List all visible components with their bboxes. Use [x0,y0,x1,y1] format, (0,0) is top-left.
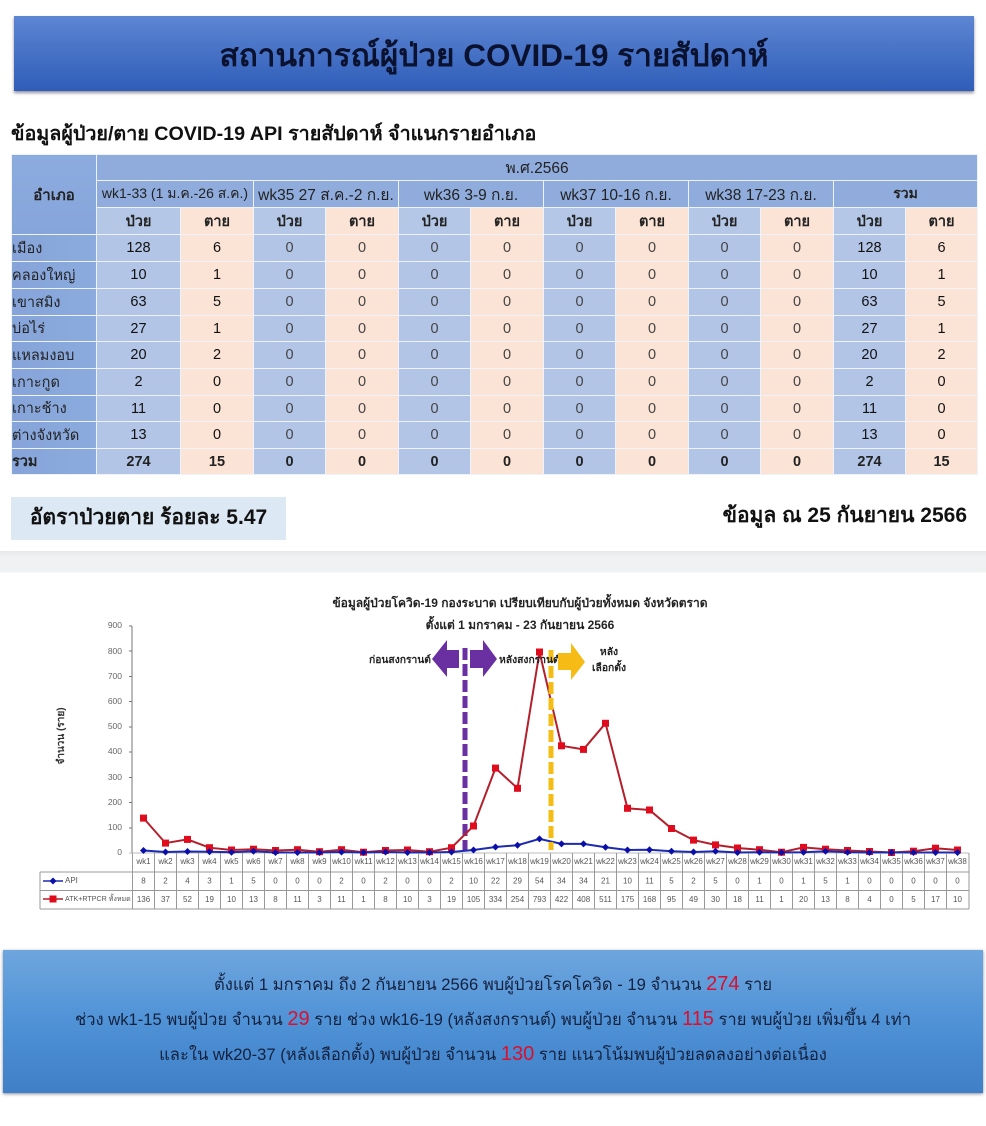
district data table: 0 [575,400,584,416]
ATK+RTPCR values: 8 [383,895,388,904]
district data table: wk37 10-16 ก.ย. [560,186,672,204]
district data table: 0 [213,374,221,390]
district data table: ตาย [494,214,520,230]
district data table: 0 [430,240,439,256]
fatality rate box [11,497,286,540]
district data table: 0 [648,267,656,283]
district data table: 0 [575,427,584,443]
district data table: 0 [720,454,729,470]
ATK+RTPCR values: 793 [533,895,547,904]
ATK+RTPCR values: 10 [403,895,412,904]
ATK+RTPCR values: 5 [911,895,916,904]
district data table: 0 [503,347,511,363]
ATK+RTPCR values: 13 [821,895,830,904]
API values: 0 [735,876,740,886]
district data table: รวม [12,454,38,470]
district data table: ต่างจังหวัด [12,428,79,444]
legend: API [43,876,78,885]
week labels: wk10 [331,857,351,866]
y axis: 300 [108,772,122,782]
district data table: ป่วย [277,214,302,230]
week labels: wk36 [903,857,923,866]
API values: 5 [823,876,828,886]
district data table: 0 [937,374,946,390]
week labels: wk21 [573,857,593,866]
API values: 22 [491,876,500,886]
title banner: สถานการณ์ผู้ป่วย COVID-19 รายสัปดาห์ [219,37,768,73]
week labels: wk7 [267,857,283,866]
district data table: 0 [575,374,584,390]
district data table: 0 [575,294,584,310]
district data table: 0 [575,347,584,363]
district data table: 1 [213,267,221,283]
district data table: 0 [430,400,439,416]
district data table: 0 [575,320,584,336]
district data table: เกาะกูด [12,374,60,390]
API values: 0 [317,876,322,886]
ATK+RTPCR values: 8 [273,895,278,904]
API values: 0 [295,876,300,886]
district data table: 1 [937,320,946,336]
district data table: 0 [937,400,946,416]
y axis label: จำนวน (ราย) [55,707,67,765]
API values: 0 [911,876,916,886]
district data table: 0 [648,347,656,363]
API values: 0 [933,876,938,886]
district data table: 274 [126,454,151,470]
week labels: wk29 [749,857,769,866]
district data table: 0 [285,374,294,390]
district data table [11,154,978,475]
y axis: 700 [108,671,122,681]
district data table: แหลมงอบ [12,348,74,364]
arrow: after Songkran [470,640,560,677]
ATK+RTPCR values: 49 [689,895,698,904]
district data table: wk35 27 ส.ค.-2 ก.ย. [258,186,394,204]
district data table: wk36 3-9 ก.ย. [424,186,518,204]
district data table: 5 [213,294,221,310]
y axis: 500 [108,721,122,731]
district data table: 0 [213,400,221,416]
district data table: 0 [430,320,439,336]
district data table: 0 [648,400,656,416]
district data table: พ.ศ.2566 [505,160,569,177]
ATK+RTPCR values: 18 [733,895,742,904]
week labels: wk2 [157,857,173,866]
API values: 0 [273,876,278,886]
ATK+RTPCR values: 52 [183,895,192,904]
summary line 2: ช่วง wk1-15 พบผู้ป่วย จำนวน 29 ราย ช่วง wk16-19 (หลังสงกรานต์) พบผู้ป่วย จำนวน 115 ราย พบผู้ป่วย เพิ่มขึ้น 4 เท่า [75,1008,911,1030]
API values: 4 [185,876,190,886]
ATK+RTPCR values: 19 [205,895,214,904]
API values: 11 [645,876,654,886]
district data table: บ่อไร่ [12,321,45,337]
district data table: 0 [285,240,294,256]
summary panel [3,950,983,1093]
district data table: 0 [793,267,801,283]
district data table: 0 [575,454,584,470]
API values: 2 [449,876,454,886]
district data table: 13 [861,427,878,443]
y axis: 900 [108,620,122,630]
district data table: 0 [937,427,946,443]
week labels [135,857,967,866]
API values: 2 [163,876,168,886]
district data table: เขาสมิง [12,294,60,310]
district data table: ป่วย [126,214,151,230]
week labels: wk35 [881,857,901,866]
week labels: wk13 [397,857,417,866]
district data table: 0 [358,294,366,310]
ATK+RTPCR values: 11 [293,895,302,904]
API values: 21 [601,876,610,886]
API values: 34 [579,876,588,886]
API values: 2 [383,876,388,886]
API values: 1 [757,876,762,886]
district data table: 0 [358,374,366,390]
district data table: อำเภอ [33,186,75,204]
district data table: 0 [430,454,439,470]
district data table: wk38 17-23 ก.ย. [705,186,817,204]
API values: 1 [229,876,234,886]
y axis: 0 [117,847,122,857]
week labels: wk5 [223,857,239,866]
ATK+RTPCR values: 511 [599,895,612,904]
API values: 5 [669,876,674,886]
district data table: 10 [130,267,147,283]
ATK+RTPCR values: 10 [227,895,236,904]
district data table: 0 [720,267,729,283]
week labels: wk11 [353,857,373,866]
ATK+RTPCR values: 3 [427,895,432,904]
district data table: 0 [720,374,729,390]
district data table: 0 [720,240,729,256]
district data table: 10 [861,267,878,283]
ATK+RTPCR values: 105 [467,895,481,904]
ATK+RTPCR values: 422 [555,895,569,904]
week labels: wk8 [289,857,305,866]
district data table: 0 [503,294,511,310]
ATK+RTPCR values: 136 [137,895,151,904]
district data table: 0 [430,374,439,390]
API values: 2 [691,876,696,886]
week labels: wk34 [859,857,879,866]
ATK+RTPCR values: 11 [337,895,346,904]
district data table: 0 [648,427,656,443]
week labels: wk24 [639,857,659,866]
week labels: wk38 [947,857,967,866]
API values: 29 [513,876,522,886]
district data table: 0 [648,374,656,390]
district data table: ป่วย [422,214,447,230]
district data table: 0 [575,240,584,256]
district data table: 0 [285,454,294,470]
district data table: 0 [793,240,801,256]
week labels: wk16 [463,857,483,866]
ATK+RTPCR values: 11 [755,895,764,904]
district data table: 0 [503,240,511,256]
district data table: ป่วย [857,214,882,230]
district data table: wk1-33 (1 ม.ค.-26 ส.ค.) [102,185,248,201]
district data table: 11 [131,400,146,416]
week labels: wk25 [661,857,681,866]
district data table: 0 [358,427,366,443]
week labels: wk28 [727,857,747,866]
district data table: 2 [134,374,143,390]
summary line 1: ตั้งแต่ 1 มกราคม ถึง 2 กันยายน 2566 พบผู้ป่วยโรคโควิด - 19 จำนวน 274 ราย [214,973,772,995]
ATK+RTPCR values: 334 [489,895,503,904]
district data table: 0 [285,347,294,363]
API values: 5 [713,876,718,886]
district data table: 0 [213,427,221,443]
ATK+RTPCR values: 3 [317,895,322,904]
week labels: wk27 [705,857,725,866]
arrow: after election [558,643,626,680]
district data table: 0 [648,454,656,470]
y axis: 800 [108,646,122,656]
district data table: 27 [130,320,147,336]
district data table: 0 [358,240,366,256]
district data table: 13 [130,427,147,443]
district data table: 128 [126,240,151,256]
district data table: 2 [865,374,874,390]
week labels: wk30 [771,857,791,866]
district data table: 0 [503,454,511,470]
ATK+RTPCR values: 95 [667,895,676,904]
district data table: 0 [793,374,801,390]
line chart: weekly patients [40,593,970,910]
district data table: 0 [793,294,801,310]
week labels: wk12 [375,857,395,866]
district data table: 2 [937,347,946,363]
week labels: wk15 [441,857,461,866]
y axis: 600 [108,696,122,706]
fatality rate box: อัตราป่วยตาย ร้อยละ 5.47 [30,506,267,529]
district data table: 0 [793,454,801,470]
week labels: wk18 [507,857,527,866]
API values: 1 [801,876,806,886]
ATK+RTPCR values: 408 [577,895,591,904]
district data table: รวม [893,185,918,201]
district data table: 0 [720,427,729,443]
district data table: ตาย [639,214,665,230]
arrow: after election: หลัง [600,646,618,658]
district data table: 128 [857,240,882,256]
week labels: wk26 [683,857,703,866]
district data table: 0 [358,347,366,363]
chart title: ข้อมูลผู้ป่วยโควิด-19 กองระบาด เปรียบเทียบกับผู้ป่วยทั้งหมด จังหวัดตราด [332,593,708,611]
district data table: 6 [937,240,946,256]
ATK+RTPCR values: 20 [799,895,808,904]
ATK+RTPCR values: 17 [931,895,940,904]
week labels: wk19 [529,857,549,866]
district data table: ป่วย [567,214,592,230]
ATK+RTPCR values: 8 [845,895,850,904]
district data table: 0 [285,320,294,336]
divider: before Songkran [462,648,468,850]
ATK+RTPCR values [137,895,962,904]
API values: 54 [535,876,544,886]
arrow: after election: เลือกตั้ง [592,659,626,674]
district data table: 0 [503,320,511,336]
chart title: ตั้งแต่ 1 มกราคม - 23 กันยายน 2566 [426,615,615,632]
district data table: 0 [430,294,439,310]
y axis: 200 [108,797,122,807]
baseline [129,852,969,854]
district data table: 1 [213,320,221,336]
district data table: คลองใหญ่ [12,268,75,284]
week labels: wk31 [793,857,813,866]
district data table: 0 [648,240,656,256]
legend: ATK+RTPCR: ATK+RTPCR ทั้งหมด [65,893,131,903]
chart title [332,593,708,632]
ATK+RTPCR values: 37 [161,895,170,904]
ATK+RTPCR values: 19 [447,895,456,904]
y axis: 100 [108,822,122,832]
y axis: 400 [108,746,122,756]
district data table: ตาย [928,214,955,230]
y axis [108,620,132,857]
summary line 3: และใน wk20-37 (หลังเลือกตั้ง) พบผู้ป่วย จำนวน 130 ราย แนวโน้มพบผู้ป่วยลดลงอย่างต่อเนื่อง [159,1043,827,1065]
arrow: before Songkran: ก่อนสงกรานต์ [369,654,431,666]
table heading: ข้อมูลผู้ป่วย/ตาย COVID-19 API รายสัปดาห์ จำแนกรายอำเภอ [11,123,536,145]
week labels: wk9 [311,857,327,866]
data date: ข้อมูล ณ 25 กันยายน 2566 [723,504,967,527]
legend: ATK+RTPCR [43,893,131,903]
week labels: wk22 [595,857,615,866]
district data table: เกาะช้าง [12,401,67,417]
legend: API: API [65,876,78,885]
week labels: wk20 [551,857,571,866]
district data table: 0 [720,347,729,363]
district data table: 0 [720,320,729,336]
district data table: ตาย [204,214,230,230]
district data table: 0 [503,374,511,390]
data table under chart [40,853,969,909]
district data table: 0 [285,427,294,443]
district data table: 20 [861,347,878,363]
district data table: 1 [937,267,946,283]
district data table: 0 [430,267,439,283]
district data table: ตาย [349,214,375,230]
API values: 1 [845,876,850,886]
district data table: 5 [937,294,946,310]
district data table: 0 [793,320,801,336]
API values: 0 [955,876,960,886]
district data table: 20 [130,347,147,363]
API values: 5 [251,876,256,886]
district data table: 0 [575,267,584,283]
district data table: 63 [130,294,147,310]
week labels: wk33 [837,857,857,866]
API values: 10 [623,876,632,886]
district data table: 6 [213,240,221,256]
API values: 0 [405,876,410,886]
divider: after election [548,650,554,850]
API values: 2 [339,876,344,886]
ATK+RTPCR values: 0 [889,895,894,904]
week labels: wk23 [617,857,637,866]
ATK+RTPCR values: 4 [867,895,872,904]
district data table: 0 [285,294,294,310]
district data table: 15 [209,454,225,470]
district data table: 0 [793,347,801,363]
API values [141,876,960,886]
district data table: 0 [720,294,729,310]
district data table: 27 [861,320,878,336]
API values: 3 [207,876,212,886]
district data table: 0 [503,400,511,416]
district data table: 63 [861,294,878,310]
district data table: 0 [648,294,656,310]
ATK+RTPCR values: 168 [643,895,657,904]
district data table: 0 [793,427,801,443]
API values: 0 [779,876,784,886]
series: API [144,839,958,852]
ATK+RTPCR values: 30 [711,895,720,904]
week labels: wk3 [179,857,195,866]
API values: 8 [141,876,146,886]
API values: 34 [557,876,566,886]
district data table: 274 [857,454,882,470]
district data table: 0 [793,400,801,416]
district data table: 2 [213,347,221,363]
week labels: wk4 [201,857,217,866]
week labels: wk32 [815,857,835,866]
week labels: wk37 [925,857,945,866]
API values: 10 [469,876,478,886]
week labels: wk14 [419,857,439,866]
district data table: 0 [358,400,366,416]
district data table: 15 [933,454,950,470]
ATK+RTPCR values: 10 [953,895,962,904]
district data table: 0 [285,400,294,416]
district data table: 0 [720,400,729,416]
ATK+RTPCR values: 1 [361,895,366,904]
API values: 0 [867,876,872,886]
district data table: 0 [430,347,439,363]
API values: 0 [361,876,366,886]
ATK+RTPCR values: 175 [621,895,635,904]
week labels: wk1 [135,857,151,866]
ATK+RTPCR values: 254 [511,895,525,904]
district data table: 0 [503,267,511,283]
ATK+RTPCR values: 13 [249,895,258,904]
district data table: 0 [358,454,366,470]
arrow: before Songkran [369,640,459,677]
series: ATK+RTPCR [144,652,958,852]
district data table: 0 [503,427,511,443]
district data table: 0 [648,320,656,336]
arrow: after Songkran: หลังสงกรานต์ [499,654,560,666]
district data table: ป่วย [712,214,737,230]
district data table: 11 [862,400,877,416]
district data table: เมือง [12,240,42,256]
district data table: 0 [430,427,439,443]
week labels: wk17 [485,857,505,866]
district data table: 0 [285,267,294,283]
district data table: ตาย [784,214,810,230]
district data table: 0 [358,267,366,283]
API values: 0 [889,876,894,886]
ATK+RTPCR values: 1 [779,895,784,904]
district data table: 0 [358,320,366,336]
week labels: wk6 [245,857,261,866]
title banner [14,16,974,91]
API values: 0 [427,876,432,886]
